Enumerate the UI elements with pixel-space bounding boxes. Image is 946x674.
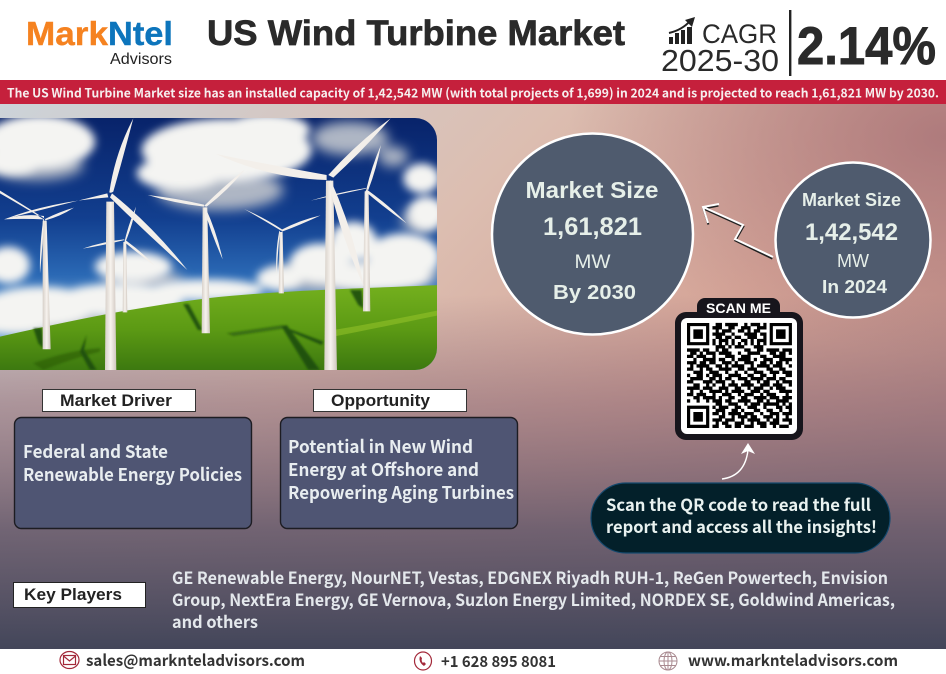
icon: growth chart <box>669 17 695 44</box>
heading: Opportunity <box>314 390 466 412</box>
QR code with SCAN ME tab <box>675 298 803 440</box>
turbines <box>0 118 407 370</box>
lower left <box>0 247 30 283</box>
CAGR block: 2025-30 <box>661 43 779 78</box>
circle: Market Size in 2024: Market Size <box>802 190 901 210</box>
curved arrow from callout to QR code <box>722 443 755 479</box>
heading: Key Players: Key Players <box>24 585 122 604</box>
panel: market driver <box>14 418 252 528</box>
icon: globe <box>659 652 677 670</box>
key players list: and others <box>172 609 258 633</box>
central cloud <box>142 118 312 182</box>
panel: opportunity: Potential in New Wind <box>288 434 473 459</box>
lower right <box>290 243 350 283</box>
CAGR block <box>661 10 936 78</box>
circle: Market Size in 2024: 1,42,542 <box>805 219 898 246</box>
right clouds <box>403 163 440 193</box>
circle: Market Size in 2024: MW <box>837 251 869 271</box>
icon: phone <box>414 652 432 670</box>
footer contact bar: www.marknteladvisors.com <box>688 649 898 671</box>
CAGR block: CAGR <box>702 19 777 49</box>
footer contact bar: sales@marknteladvisors.com <box>86 649 305 671</box>
panel: opportunity: Repowering Aging Turbines <box>288 480 514 505</box>
callout: scan the QR code: report and access all the insights! <box>606 514 877 538</box>
CAGR block: 2.14% <box>797 17 936 76</box>
circle: Market Size by 2030: MW <box>574 252 611 273</box>
logo: MarkNtel Advisors: Mark <box>26 16 108 53</box>
logo: MarkNtel Advisors <box>26 16 173 68</box>
title: US Wind Turbine Market <box>207 14 625 53</box>
circle: Market Size in 2024 <box>776 162 930 318</box>
QR code with SCAN ME tab: SCAN ME <box>706 300 771 316</box>
circle: Market Size by 2030: By 2030 <box>553 282 636 304</box>
key players list: Group, NextEra Energy, GE Vernova, Suzlon Energy Limited, NORDEX SE, Goldwind Americas, <box>172 587 895 611</box>
heading: Opportunity: Opportunity <box>331 391 431 410</box>
heading: Market Driver <box>42 390 196 412</box>
icon: email <box>60 652 79 668</box>
circle: Market Size by 2030: Market Size <box>526 177 658 203</box>
footer contact bar <box>0 649 946 674</box>
photo: wind turbines on a green hill <box>0 113 445 373</box>
panel: market driver: Federal and State <box>23 439 168 464</box>
hill <box>0 285 440 373</box>
clouds grey undersides <box>0 122 440 333</box>
circle: Market Size in 2024: In 2024 <box>822 277 887 297</box>
logo: MarkNtel Advisors: Ntel <box>108 16 173 53</box>
logo: MarkNtel Advisors: Advisors <box>110 51 172 68</box>
panel: opportunity <box>280 418 518 528</box>
small rear turbines <box>123 242 127 312</box>
panel: market driver: Renewable Energy Policies <box>23 462 242 487</box>
circle: Market Size by 2030 <box>492 134 693 334</box>
upper-left cloud <box>0 115 95 168</box>
red summary banner: The US Wind Turbine Market size has an installed capacity of 1,42,542 MW (with total projects of 1,699) in 2024 and is projected to reach 1,61,821 MW by 2030. <box>7 82 939 102</box>
arrow from 2024 to 2030 <box>703 204 773 259</box>
heading: Key Players <box>14 582 146 608</box>
panel: opportunity: Energy at Offshore and <box>288 457 479 482</box>
callout: scan the QR code: Scan the QR code to read the full <box>606 492 871 516</box>
circle: Market Size by 2030: 1,61,821 <box>543 213 642 241</box>
key players list: GE Renewable Energy, NourNET, Vestas, EDGNEX Riyadh RUH-1, ReGen Powertech, Envision <box>172 565 888 589</box>
heading: Market Driver: Market Driver <box>60 391 172 410</box>
callout: scan the QR code <box>591 483 890 553</box>
large foreground turbines <box>105 202 116 370</box>
key players list <box>172 565 895 633</box>
footer contact bar: +1 628 895 8081 <box>441 650 556 672</box>
